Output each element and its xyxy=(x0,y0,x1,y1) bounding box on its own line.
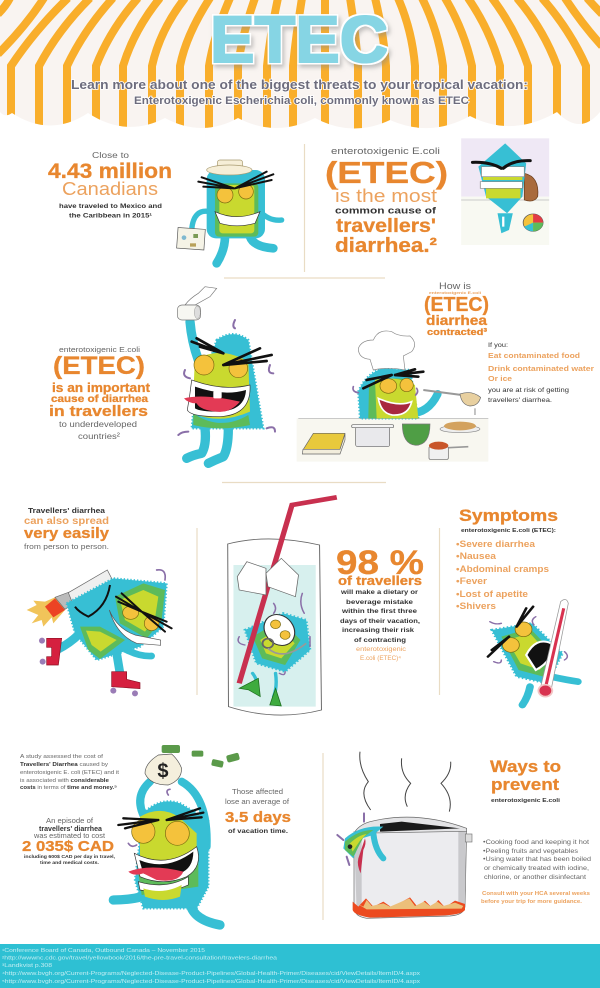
text: how is ETEC contracted: Or ice xyxy=(488,374,512,383)
text: how is ETEC contracted: If you: xyxy=(488,342,508,349)
text: ways to prevent: Ways to xyxy=(490,757,561,776)
chef hat xyxy=(358,331,415,370)
text: ETEC most common cause: travellers' xyxy=(336,216,436,237)
text: 98 percent of travellers xyxy=(336,544,424,662)
text: important cause in travellers xyxy=(49,347,151,441)
text: cost of an episode: 2 035$ CAD xyxy=(22,838,114,855)
awning header xyxy=(0,0,600,140)
text: how is ETEC contracted: enterotoxigenic E.coli xyxy=(429,290,481,295)
money bills xyxy=(162,745,240,768)
text: study cost paragraph: is associated with considerable xyxy=(20,778,109,784)
money bag: $ xyxy=(157,760,168,782)
text: cost of an episode xyxy=(22,816,115,865)
text: symptoms list: •Fever xyxy=(456,576,488,586)
footer references: ¹Conference Board of Canada, Outbound Canada – November 2015 xyxy=(2,948,205,954)
text: cost of an episode: travellers' diarrhea xyxy=(39,826,102,833)
footer references: ⁴http://www.bvgh.org/Current-Programs/Neglected-Disease-Product-Pipelines/Global-Health-Primer/Diseases/cid/ViewDetails/ItemID/4.aspx xyxy=(2,971,421,977)
rocket flame xyxy=(27,597,65,627)
steam xyxy=(360,752,451,812)
hat xyxy=(207,160,252,175)
flippers xyxy=(239,678,281,706)
yellow dish xyxy=(302,433,345,454)
text: symptoms list: enterotoxigenic E.coli (ETEC): xyxy=(461,528,556,534)
text: symptoms list: •Abdominal cramps xyxy=(456,564,549,574)
text: cost of an episode: including 600$ CAD per day in travel, xyxy=(24,854,115,859)
text: how is ETEC contracted: How is xyxy=(439,281,472,291)
subtitle xyxy=(71,78,528,107)
text: prevention list: •Using water that has been boiled xyxy=(483,856,591,863)
divider xyxy=(196,528,198,695)
chef monster at counter xyxy=(297,331,488,462)
spoon xyxy=(423,390,481,415)
text: cost of an episode: An episode of xyxy=(46,816,94,825)
straw xyxy=(239,497,337,683)
text: cost of an episode: was estimated to cost xyxy=(33,831,106,840)
title: ETEC xyxy=(210,2,388,76)
text: study cost paragraph: enterotoxigenic E. coli (ETEC) and it xyxy=(20,770,120,776)
glass with monster and straw xyxy=(228,497,337,715)
divider xyxy=(304,144,306,272)
text: important cause in travellers: enterotoxigenic E.coli xyxy=(59,347,141,354)
text: 98 percent of travellers: of travellers xyxy=(338,573,422,588)
subtitle: Enterotoxigenic Escherichia coli, commonly known as ETEC xyxy=(134,95,469,107)
pot body xyxy=(354,829,467,918)
toilet paper xyxy=(177,287,217,320)
text: prevention list xyxy=(483,839,591,881)
text: how is ETEC contracted: contracted³ xyxy=(427,327,487,338)
text: consult your HCA xyxy=(481,891,590,905)
text: ETEC most common cause: (ETEC) xyxy=(325,155,448,190)
text: important cause in travellers: cause of diarrhea xyxy=(51,393,148,405)
sick monster with thermometer xyxy=(488,600,578,705)
plate of food xyxy=(440,422,480,433)
text: cost of an episode: time and medical costs. xyxy=(40,860,99,865)
text: 98 percent of travellers: E.coli (ETEC)⁴ xyxy=(360,655,401,662)
text: ways to prevent: prevent xyxy=(491,775,559,794)
text: study cost paragraph: Travellers' Diarrhea caused by xyxy=(20,762,108,768)
text: how is ETEC contracted: (ETEC) xyxy=(424,294,489,316)
text: 98 percent of travellers: will make a dietary or xyxy=(340,589,419,596)
text: important cause in travellers: countries² xyxy=(78,431,120,441)
text: important cause in travellers: to underdeveloped xyxy=(59,419,137,429)
text: prevention list: chlorine, or another disinfectant xyxy=(484,874,586,881)
text: symptoms list: Symptoms xyxy=(459,506,558,525)
text: vacation days lost: of vacation time. xyxy=(228,828,288,835)
pot rim xyxy=(354,817,467,833)
rocket skating monster xyxy=(27,570,172,696)
roller skate front xyxy=(110,672,140,696)
text: 4.43 million Canadians: have traveled to Mexico and xyxy=(59,203,162,210)
divider xyxy=(438,528,440,695)
beach monster illustration xyxy=(461,138,549,245)
text: prevention list: •Cooking food and keeping it hot xyxy=(483,839,589,846)
text: ETEC most common cause: enterotoxigenic E.coli xyxy=(331,146,440,156)
footer references xyxy=(0,944,600,988)
rocket xyxy=(55,570,113,609)
text: spread easily: Travellers' diarrhea xyxy=(28,506,106,515)
text: ETEC most common cause xyxy=(325,146,448,257)
text: how is ETEC contracted xyxy=(424,281,594,404)
text: vacation days lost: 3.5 days xyxy=(225,810,291,826)
text: 98 percent of travellers: of contracting xyxy=(354,637,406,644)
flames xyxy=(353,897,465,918)
text: important cause in travellers: (ETEC) xyxy=(53,352,145,380)
divider xyxy=(222,482,386,484)
text: 98 percent of travellers: within the first three xyxy=(341,608,417,615)
text: study cost paragraph: A study assessed the cost of xyxy=(20,754,104,760)
thermometer xyxy=(538,600,568,697)
text: prevention list: •Peeling fruits and vegetables xyxy=(483,848,579,855)
text: ETEC most common cause: diarrhea.² xyxy=(335,235,437,257)
text: symptoms list xyxy=(456,506,558,611)
text: vacation days lost: Those affected xyxy=(232,787,283,796)
text: how is ETEC contracted: Drink contaminated water xyxy=(488,364,594,373)
text: spread easily: very easily xyxy=(24,526,109,542)
text: vacation days lost: lose an average of xyxy=(225,797,290,806)
divider xyxy=(224,277,385,279)
roller skate back xyxy=(39,638,62,665)
text: ways to prevent xyxy=(490,757,561,804)
boiling pot with monster xyxy=(337,752,472,918)
text: 4.43 million Canadians xyxy=(48,150,172,220)
text: 98 percent of travellers: beverage mistake xyxy=(346,599,413,606)
green bowl xyxy=(402,424,430,445)
text: consult your HCA: Consult with your HCA several weeks xyxy=(482,891,590,897)
suitcase xyxy=(177,227,205,250)
small saucepan xyxy=(429,442,468,459)
text: 4.43 million Canadians: 4.43 million xyxy=(48,160,172,183)
monster with money bag xyxy=(113,745,240,925)
text: 4.43 million Canadians: the Caribbean in 2015¹ xyxy=(69,212,152,220)
text: prevention list: or chemically treated with iodine, xyxy=(484,865,589,872)
text: spread easily: can also spread xyxy=(24,516,109,527)
money bag xyxy=(145,754,182,785)
text: study cost paragraph: costs in terms of time and money.⁵ xyxy=(20,785,117,791)
text: how is ETEC contracted: you are at risk of getting xyxy=(488,387,569,394)
subtitle: Learn more about one of the biggest threats to your tropical vacation: xyxy=(71,78,528,92)
footer references: ⁵http://www.bvgh.org/Current-Programs/Neglected-Disease-Product-Pipelines/Global-Health-Primer/Diseases/cid/ViewDetails/ItemID/4.aspx xyxy=(2,979,421,985)
pot xyxy=(352,425,394,447)
footer references: ²http://wwwnc.cdc.gov/travel/yellowbook/2016/the-pre-travel-consultation/travelers-diarrhea xyxy=(2,956,277,962)
ice cubes xyxy=(237,558,299,597)
text: symptoms list: •Nausea xyxy=(456,551,497,561)
text: important cause in travellers: in travellers xyxy=(49,404,148,420)
text: spread easily: from person to person. xyxy=(24,544,109,551)
divider xyxy=(322,753,324,920)
monster with hat and suitcase xyxy=(177,160,282,263)
text: 98 percent of travellers: increasing their risk xyxy=(342,627,414,634)
footer references: ³Landkvist p.308 xyxy=(2,963,52,969)
text: 4.43 million Canadians: Canadians xyxy=(62,179,158,199)
monster hanging on rim xyxy=(337,813,383,873)
text: 98 percent of travellers: days of their vacation, xyxy=(340,618,420,625)
text: vacation days lost xyxy=(225,787,291,835)
text: ways to prevent: enterotoxigenic E.coli xyxy=(491,798,561,804)
text: ETEC most common cause: common cause of xyxy=(335,206,437,216)
beach ball xyxy=(523,214,543,231)
text: ETEC most common cause: is the most xyxy=(335,186,437,206)
monster holding toilet paper xyxy=(177,287,275,463)
text: consult your HCA: before your trip for more guidance. xyxy=(481,899,583,905)
text: 98 percent of travellers: enterotoxigenic xyxy=(356,647,406,653)
text: important cause in travellers: is an important xyxy=(52,381,151,395)
text: study cost paragraph xyxy=(20,754,120,791)
text: 4.43 million Canadians: Close to xyxy=(92,150,129,160)
text: symptoms list: •Lost of apetite xyxy=(456,589,528,599)
text: spread easily xyxy=(24,506,109,551)
text: symptoms list: •Severe diarrhea xyxy=(456,539,536,549)
text: how is ETEC contracted: Eat contaminated food xyxy=(488,351,580,360)
text: how is ETEC contracted: diarrhea xyxy=(426,312,487,328)
text: how is ETEC contracted: travellers' diarrhea. xyxy=(488,397,552,404)
text: 98 percent of travellers: 98 % xyxy=(336,544,424,582)
text: symptoms list: •Shivers xyxy=(456,601,496,611)
